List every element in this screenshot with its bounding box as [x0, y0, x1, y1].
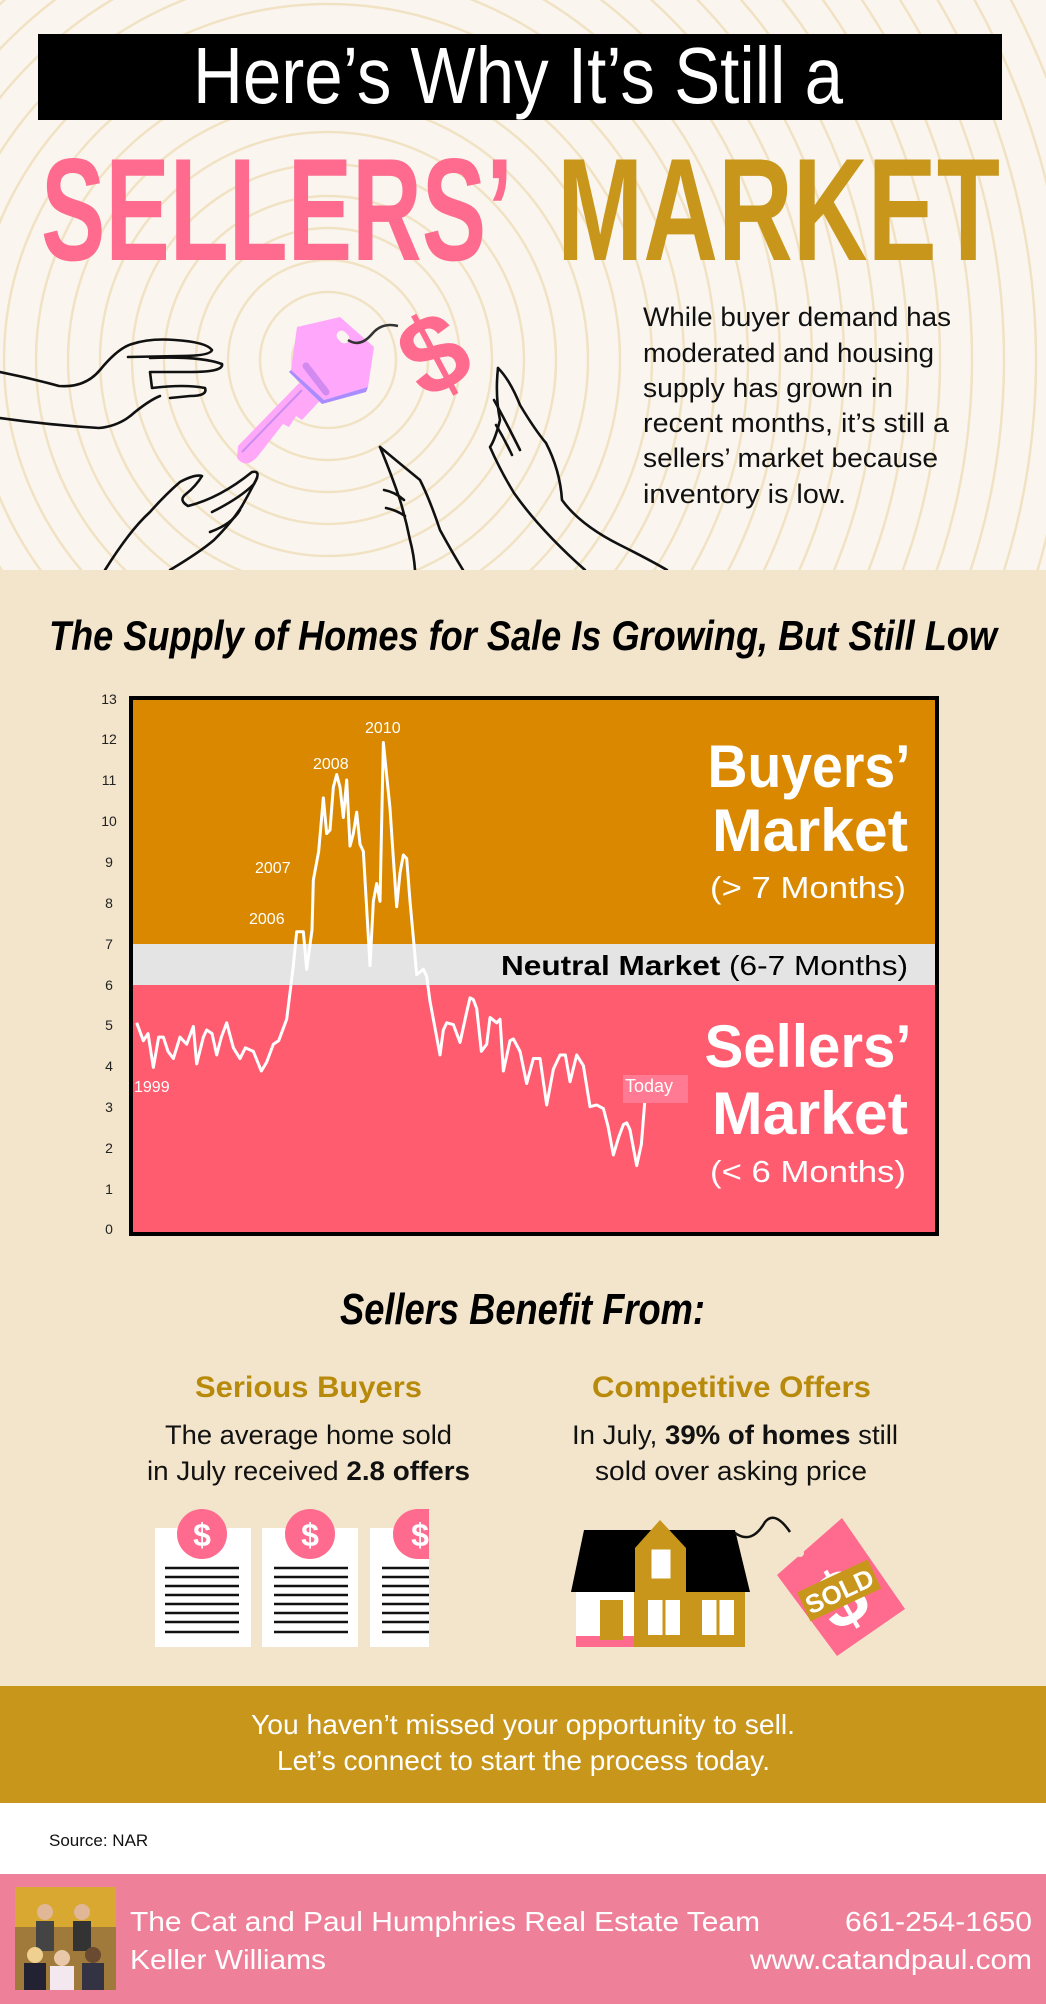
intro paragraph: While buyer demand has: [643, 302, 951, 332]
buyers market label: Market: [712, 797, 908, 864]
sellers market label: (< 6 Months): [710, 1154, 906, 1189]
buyers market label: [708, 733, 910, 905]
icon: offer documents: $: [301, 1517, 319, 1553]
panel: serious buyers: Serious Buyers: [195, 1371, 422, 1404]
hands: [0, 340, 667, 570]
y axis labels: 11: [102, 772, 116, 788]
panel: competitive offers: [571, 1371, 905, 1656]
y axis labels: 8: [105, 895, 113, 911]
year labels: 2007: [255, 860, 291, 877]
call to action band: You haven’t missed your opportunity to sell.: [251, 1709, 795, 1740]
heading: sellers benefit from: Sellers Benefit From:: [340, 1285, 705, 1334]
year labels: 1999: [134, 1079, 170, 1096]
intro paragraph: moderated and housing: [643, 338, 934, 368]
icon: sold tag: SOLD: [800, 1562, 879, 1620]
call to action band: [0, 1686, 1046, 1803]
today label: Today: [625, 1076, 673, 1096]
panel: serious buyers: [147, 1371, 470, 1650]
panel: competitive offers: sold over asking price: [595, 1456, 867, 1486]
data line: [137, 742, 645, 1166]
y axis labels: 12: [101, 731, 117, 747]
team photo: [15, 1887, 116, 1990]
y axis labels: 4: [105, 1058, 113, 1074]
y axis labels: 6: [105, 977, 113, 993]
hero background: [0, 0, 1046, 1132]
y axis labels: 9: [105, 854, 113, 870]
intro paragraph: inventory is low.: [643, 479, 846, 509]
y axis labels: 0: [105, 1221, 113, 1237]
y axis labels: 1: [105, 1181, 113, 1197]
year labels: 2010: [365, 720, 401, 737]
panel: competitive offers: Competitive Offers: [592, 1371, 871, 1404]
source note: [0, 1803, 1046, 1874]
year labels: [134, 720, 401, 1096]
y axis labels: [101, 691, 117, 1237]
intro paragraph: [643, 302, 951, 509]
panel: competitive offers: In July, 39% of homes still: [572, 1420, 898, 1450]
sellers market label: [704, 1013, 912, 1189]
panel: serious buyers: in July received 2.8 offers: [147, 1456, 470, 1486]
icon: offer documents: $: [411, 1517, 429, 1553]
icon: house: [571, 1518, 790, 1647]
footer: The Cat and Paul Humphries Real Estate Team: [130, 1906, 760, 1937]
footer: Keller Williams: [130, 1944, 326, 1975]
footer: www.catandpaul.com: [749, 1944, 1032, 1975]
y axis labels: 7: [105, 936, 113, 952]
icon: offer documents: [155, 1500, 449, 1650]
footer: 661-254-1650: [845, 1906, 1032, 1937]
intro paragraph: recent months, it’s still a: [643, 408, 950, 438]
today label: [623, 1075, 688, 1103]
buyers market label: (> 7 Months): [710, 870, 906, 905]
icon: sold tag: [777, 1518, 905, 1656]
icon: key: [237, 317, 398, 464]
y axis labels: 13: [101, 691, 117, 707]
y axis labels: 5: [105, 1017, 113, 1033]
year labels: 2006: [249, 911, 285, 928]
source note: Source: NAR: [49, 1831, 148, 1850]
icon: dollar sign charm: $: [378, 286, 490, 423]
illustration: hands with key: [0, 286, 667, 570]
intro paragraph: supply has grown in: [643, 373, 893, 403]
icon: sold tag: $: [800, 1549, 883, 1648]
intro paragraph: sellers’ market because: [643, 443, 938, 473]
title bar: Here’s Why It’s Still a: [193, 31, 843, 120]
footer: [0, 1874, 1046, 2004]
call to action band: Let’s connect to start the process today.: [277, 1745, 770, 1776]
buyers market label: Buyers’: [708, 733, 910, 800]
year labels: 2008: [313, 756, 349, 773]
sellers market label: Market: [712, 1080, 908, 1147]
panel: serious buyers: The average home sold: [165, 1420, 452, 1450]
y axis labels: 10: [101, 813, 117, 829]
main section background: [0, 570, 1046, 1686]
neutral market label: Neutral Market (6-7 Months): [501, 950, 908, 981]
headline: sellers' market: SELLERS’: [41, 128, 513, 291]
chart: months of supply: [101, 691, 937, 1237]
y axis labels: 3: [105, 1099, 113, 1115]
y axis labels: 2: [105, 1140, 113, 1156]
icon: offer documents: $: [193, 1517, 211, 1553]
sellers market label: Sellers’: [704, 1013, 912, 1080]
